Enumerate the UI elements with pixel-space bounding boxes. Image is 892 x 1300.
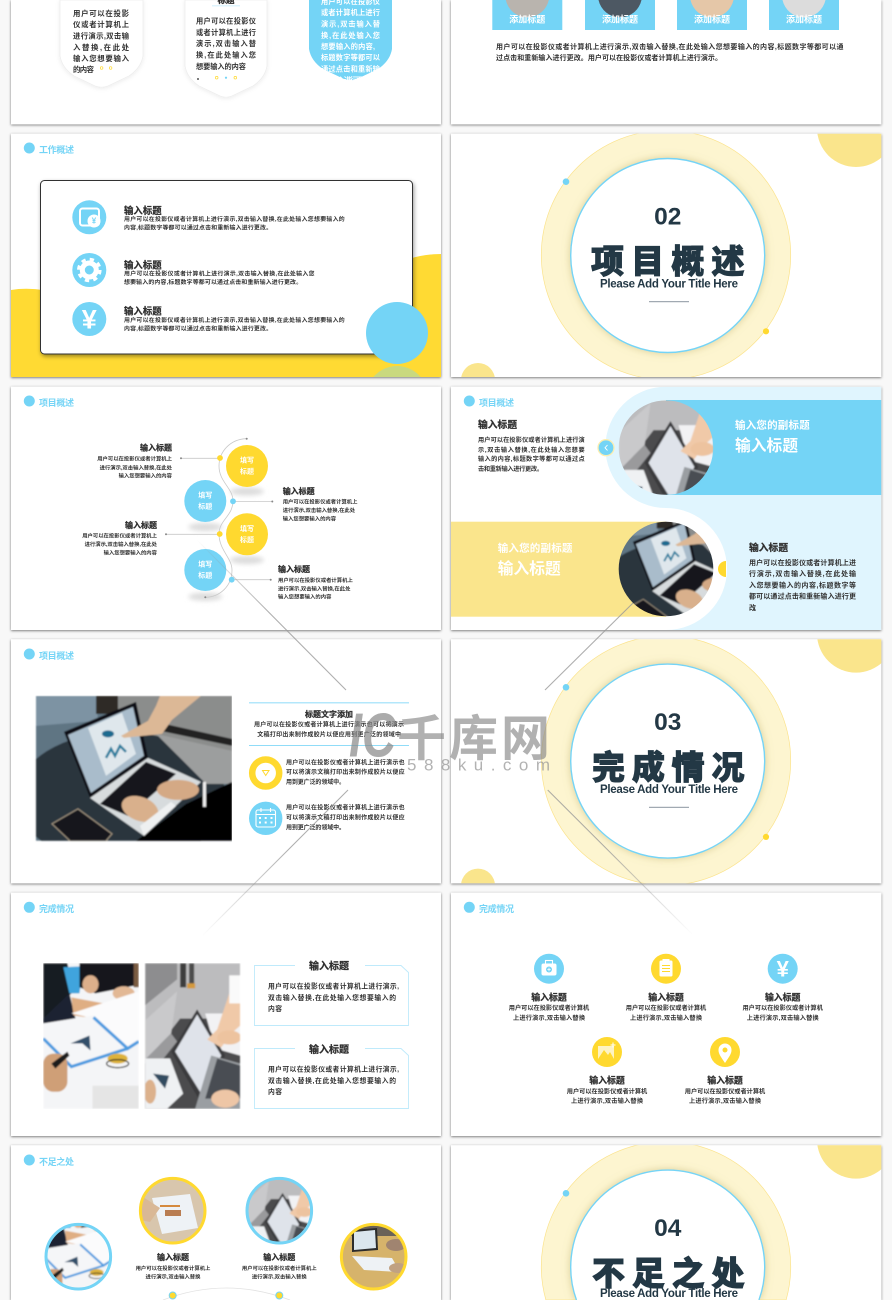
watermark: 千库网 [397,700,550,770]
card 3 (blue): 换,在此处输入您 [321,31,380,40]
item 1 icon: wallet [72,200,106,234]
section number: 02 [654,204,681,230]
body text: 过点击和重新输入进行更改。用户可以在投影仪或者计算机上进行演示。 [496,53,722,62]
slide: 项目概述 S-curve timeline [11,387,441,630]
subtitle: Please Add Your Title Here [600,1288,738,1300]
header: 完成情况 [39,903,74,914]
outer ring [541,130,791,380]
section title: 项目概述 [591,243,744,280]
item 2 text: 输入标题 [124,260,162,270]
caption 2 [242,1252,317,1280]
outer ring [541,636,791,885]
item 1 text: 用户可以在投影仪或者计算机上进行演示,双击输入替换,在此处输入您想要输入的 [124,215,345,223]
yellow wave background [11,254,441,377]
text block 1: 输入您想要输入的内容 [119,472,173,480]
bottom circle [461,363,495,377]
left text block: 用户可以在投影仪或者计算机上进行演 [478,436,585,444]
body text [496,42,844,62]
left text block: 输入的内容,标题数字等都可以通过点 [478,455,585,463]
item: picture [567,1037,648,1105]
node 2 [184,480,226,522]
slide: shield cards (cropped top) [11,0,441,124]
node 2: 标题 [198,502,212,510]
card 1: 的内容 [73,65,95,74]
corner circle [817,595,892,673]
node 3: 填写 [240,524,254,533]
list text 1: 可以将演示文稿打印出来制作成胶片以便应 [286,768,405,776]
card 3 (blue) [309,0,392,85]
text block 3: 输入您想要输入的内容 [104,549,158,557]
header [24,142,74,155]
header [464,396,514,408]
blue band text: 输入标题 [735,436,798,455]
item: medical kit [509,954,590,1022]
photo circle 3 [246,1161,313,1261]
arrow button [598,440,614,456]
item: picture: 上进行演示,双击输入替换 [571,1097,644,1105]
slide: 完成情况 five icon items [451,893,881,1136]
text block 1 [97,442,173,480]
card 1 [60,0,143,87]
item 3 icon: yuan: ¥ [82,304,97,334]
slide: 项目概述 two photo bands [451,375,881,640]
right text block: 改。 [749,603,760,612]
inner circle [571,1170,765,1300]
photo circle 2 [140,1178,206,1244]
text block 2 [283,486,358,522]
text block 3: 用户可以在投影仪或者计算机上 [82,532,158,540]
card 1: 输入您想要输入 [73,54,130,63]
corner circle [817,1101,892,1179]
caption 1: 输入标题 [157,1252,189,1262]
item: medical kit: 用户可以在投影仪或者计算机 [509,1004,590,1012]
text block 3: 进行演示,双击输入替换,在此处 [85,540,158,548]
short rule [649,301,689,302]
folder photo [43,963,139,1109]
card 3 (blue): 通过点击和重新输 [321,64,381,74]
header: 不足之处 [39,1156,74,1167]
item: map pin [685,1037,766,1105]
laptop photo [16,696,232,864]
card 3 (blue): 想要输入的内容, [321,42,375,51]
item: clipboard: 用户可以在投影仪或者计算机 [626,1004,707,1012]
node 2: 填写 [198,490,212,500]
photo circle 4 [341,1224,407,1290]
photo box 2: 添加标题 [602,14,638,24]
intro text block [249,702,409,746]
text block 2: 输入您想要输入的内容 [283,514,337,522]
item 1 text: 内容,标题数字等都可以通过点击和重新输入进行更改。 [124,224,272,232]
photo box 4: 添加标题 [786,14,822,24]
node 1: 填写 [240,456,254,464]
text block 4: 进行演示,双击输入替换,在此处 [278,584,351,592]
card 1: 仪或者计算机上 [73,20,130,29]
card 2 [185,0,267,97]
bottom arc with dots [163,1288,290,1300]
list icon: calendar [249,802,282,835]
caption 1: 用户可以在投影仪或者计算机上 [136,1264,211,1272]
header: 项目概述 [39,650,74,661]
item: medical kit: 上进行演示,双击输入替换 [513,1014,586,1022]
node 3: 标题 [240,535,254,544]
section title: 完成情况 [592,749,744,786]
blue decorative circle [366,302,428,364]
card 2: 或者计算机上进行 [196,28,256,37]
node 1: 标题 [240,466,254,476]
inner circle [571,158,765,352]
text block 1: 用户可以在投影仪或者计算机上 [97,455,173,463]
header: 项目概述 [479,397,514,408]
node 3 [226,513,268,555]
item 1 icon: wallet: ¥ [92,216,97,226]
frame card 1: 用户可以在投影仪或者计算机上进行演示, [268,982,399,990]
right text block: 输入标题 [749,541,788,554]
body text: 用户可以在投影仪或者计算机上进行演示,双击输入替换,在此处输入您想要输入的内容,标题数字等都可以通 [496,42,844,51]
text block 2: 进行演示,双击输入替换,在此处 [283,506,356,514]
frame card 2: 双击输入替换,在此处输入您想要输入的 [268,1076,396,1085]
frame card 1: 输入标题 [309,960,349,972]
item 1 text: 输入标题 [124,205,162,216]
caption 2: 进行演示,双击输入替换 [252,1272,307,1280]
item: yuan: 上进行演示,双击输入替换 [747,1014,820,1022]
photo box 2 [585,0,655,30]
watermark [197,540,693,936]
right text block: 都可以通过点击和重新输入进行更 [749,592,856,600]
card 1: 进行演示,双击输 [73,32,130,40]
subtitle: Please Add Your Title Here [600,784,738,796]
item: clipboard [626,954,707,1022]
header [24,902,74,914]
photo circle: meeting laptops [618,400,714,495]
blue dot [563,684,569,691]
frame card 1 [254,960,408,1026]
section title: 不足之处 [592,1255,744,1292]
right text block [749,541,856,612]
item: picture: 输入标题 [589,1075,625,1086]
item: clipboard: 上进行演示,双击输入替换 [630,1014,703,1022]
card 1: 用户可以在投影 [73,9,130,18]
blue dot [563,1190,569,1197]
list text 1 [286,758,405,786]
content panel [40,180,412,354]
item: yuan: ¥ [777,956,790,982]
blue band text: 输入您的副标题 [735,419,810,432]
caption 1 [136,1252,211,1280]
text block 2: 用户可以在投影仪或者计算机上 [283,497,358,505]
slide: 04 不足之处 section cover [451,1101,892,1300]
blue dot [563,178,569,185]
frame card 2: 内容 [268,1087,282,1096]
slide: 不足之处 photo circles [11,1145,441,1300]
item: yuan: 输入标题 [765,991,801,1002]
short rule [649,807,689,808]
card 2: 用户可以在投影仪 [196,16,257,26]
list icon: ring [252,760,279,786]
item: yuan: 用户可以在投影仪或者计算机 [742,1004,824,1012]
yellow band [451,522,666,617]
item 3 text: 用户可以在投影仪或者计算机上进行演示,双击输入替换,在此处输入您想要输入的 [124,316,345,324]
list text 1: 用户可以在投影仪或者计算机上进行演示也 [286,758,405,766]
right text block: 入您想要输入的内容,标题数字等 [749,580,856,590]
photo box 1 [492,0,562,30]
text block 3 [82,520,158,557]
intro text block: 文稿打印出来制作成胶片以便应用到更广泛的领域中 [257,730,401,738]
yellow half-dot [718,561,726,577]
yellow band text: 输入标题 [498,559,561,578]
item 2 text: 想要输入的内容,标题数字等都可以通过点击和重新输入进行更改。 [124,278,302,286]
item 3 text [124,306,345,333]
text block 1: 输入标题 [140,442,172,452]
item: clipboard: 输入标题 [648,991,684,1002]
yellow band text: 输入您的副标题 [498,541,573,554]
meeting photo [144,963,241,1109]
caption 2: 输入标题 [263,1252,295,1262]
subtitle: Please Add Your Title Here [600,278,738,290]
left text block: 示,双击输入替换,在此处输入您想要 [478,446,585,454]
slide: 工作概述 [9,132,443,380]
yellow dot [763,834,769,840]
text block 1: 进行演示,双击输入替换,在此处 [100,463,173,471]
leader lines [165,438,273,598]
frame card 1: 内容 [268,1004,282,1013]
card 1: 入替换,在此处 [73,43,130,52]
card 3 (blue): 演示,双击输入替 [321,20,381,28]
card 2: 演示,双击输入替 [196,39,257,48]
right text block: 行演示,双击输入替换,在此处输 [749,569,856,578]
item: yuan [742,954,824,1022]
intro text block: 标题文字添加 [305,709,353,719]
slide: 完成情况 two photos with frames [11,893,441,1136]
photo circle 1 [46,1207,111,1300]
green decorative circle [374,366,420,377]
node 4: 标题 [198,570,212,580]
caption 2: 用户可以在投影仪或者计算机上 [242,1264,317,1272]
header [464,902,514,914]
item: map pin: 输入标题 [707,1075,743,1086]
text block 4: 输入标题 [278,564,310,574]
yellow dot [763,328,769,334]
yellow band text [498,541,573,578]
item: map pin: 上进行演示,双击输入替换 [689,1097,762,1105]
header [24,1154,74,1167]
header: 完成情况 [479,903,514,914]
list text 2: 可以将演示文稿打印出来制作成胶片以便应 [286,814,405,822]
slide: 02 项目概述 section cover [449,132,884,380]
photo box 3 [677,0,747,30]
slide: four titled photo boxes (cropped top) [451,0,881,124]
item: picture: 用户可以在投影仪或者计算机 [567,1088,648,1096]
card 2: 想要输入的内容 [196,62,246,71]
corner circle [817,134,882,167]
node 1 [226,445,268,487]
photo box 3: 添加标题 [694,14,730,24]
blue band text [735,419,810,455]
text block 3: 输入标题 [125,520,157,530]
frame card 2 [254,1043,408,1108]
text block 4 [278,564,353,601]
circle shadows [188,488,264,601]
header [24,648,74,661]
card 2: 换,在此处输入您 [196,50,256,60]
item: map pin: 用户可以在投影仪或者计算机 [685,1088,766,1096]
blue band [666,400,881,495]
list text 1: 用到更广泛的领域中。 [286,778,345,786]
node dots [217,455,236,583]
node 4 [184,549,226,591]
light blue S-shape background [605,387,881,630]
header [24,396,74,408]
item 3 text: 内容,标题数字等都可以通过点击和重新输入进行更改。 [124,325,272,333]
frame card 2: 用户可以在投影仪或者计算机上进行演示, [268,1064,399,1074]
bottom circle [461,869,495,903]
right text block: 用户可以在投影仪或者计算机上进 [749,558,856,567]
text block 4: 输入您想要输入的内容 [278,593,332,601]
frame card 2: 输入标题 [309,1043,349,1056]
left text block: 输入标题 [478,418,517,431]
left text block: 击和重新输入进行更改。 [478,465,543,473]
left text block [478,418,585,473]
frame card 1: 双击输入替换,在此处输入您想要输入的 [268,993,396,1002]
S-curve connector [205,439,247,597]
inner circle [571,664,765,858]
photo box 4 [769,0,839,30]
slide: 03 完成情况 section cover [451,595,892,903]
header: 项目概述 [39,397,74,408]
list text 2: 用到更广泛的领域中。 [286,824,345,832]
outer ring [541,1142,791,1300]
caption 1: 进行演示,双击输入替换 [146,1272,201,1280]
node 4: 填写 [198,560,212,568]
header: 工作概述 [39,144,74,155]
photo box 1: 添加标题 [509,14,545,24]
text block 2: 输入标题 [283,486,315,496]
card 3 (blue): 标题数字等都可以 [321,53,381,62]
item 1 text [124,205,345,232]
item 2 text [124,260,315,286]
item: medical kit: 输入标题 [531,991,567,1002]
slide: 项目概述 photo with list [11,639,441,883]
text block 4: 用户可以在投影仪或者计算机上 [278,576,353,584]
section number: 03 [654,709,681,736]
watermark: IC [349,702,397,770]
card 3 (blue): 入进行更 [338,76,364,84]
list text 2 [286,804,405,832]
section number: 04 [654,1215,682,1242]
item 2 icon: gear [72,253,106,287]
intro text block: 用户可以在投影仪或者计算机上进行演示也可以将演示 [254,720,404,728]
item 3 text: 输入标题 [124,306,162,316]
item 2 text: 用户可以在投影仪或者计算机上进行演示,双击输入替换,在此处输入您 [124,269,315,277]
card 3 (blue): 或者计算机上进行 [321,8,380,17]
watermark: 588ku.com [407,756,550,774]
photo circle: typing on laptop [618,522,714,616]
list text 2: 用户可以在投影仪或者计算机上进行演示也 [286,804,405,812]
item 3 icon: yuan [72,302,106,336]
